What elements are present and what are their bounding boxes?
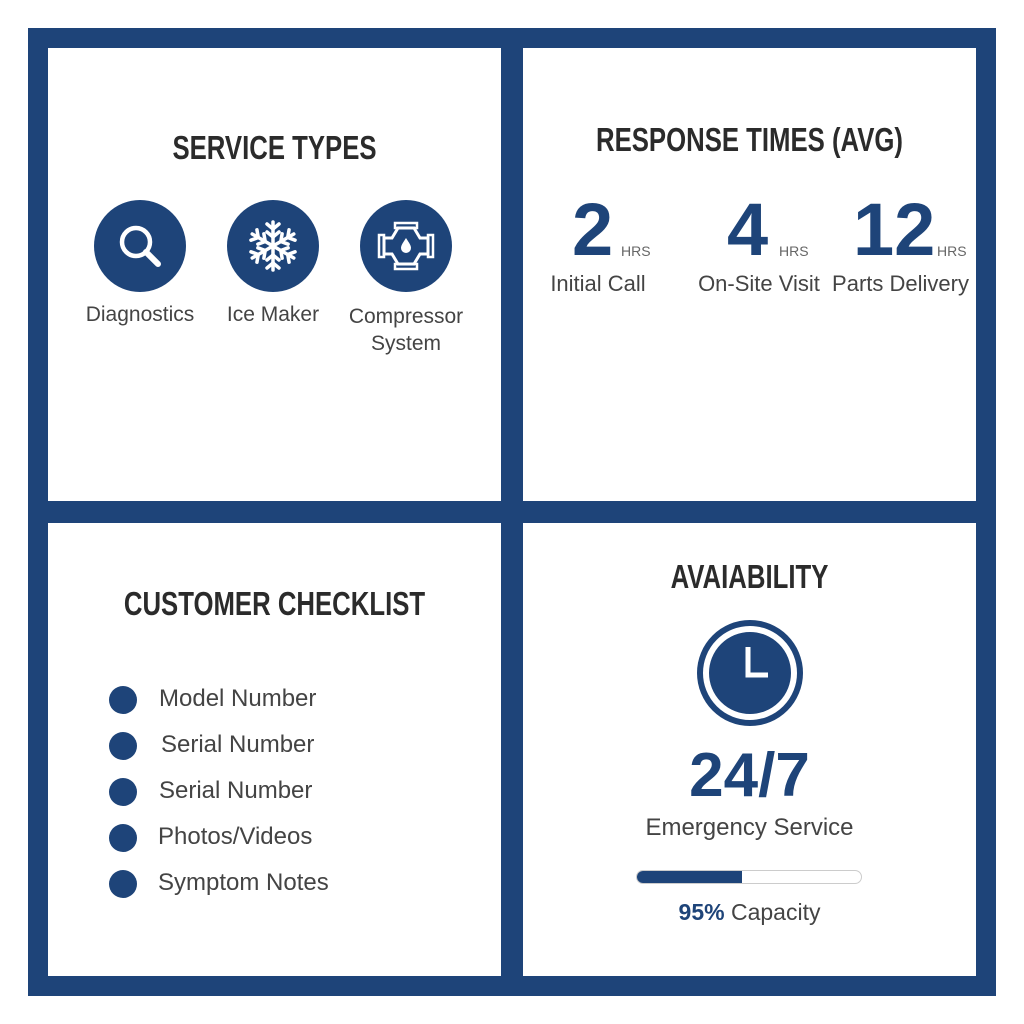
checklist items: Photos/Videos <box>158 823 312 850</box>
label: emergency service: Emergency Service <box>645 814 854 841</box>
item 1 <box>109 685 316 714</box>
label: compressor system: System <box>371 332 441 355</box>
heading: availability: AVAIABILITY <box>671 558 828 595</box>
stat: 4 hrs <box>727 188 809 271</box>
checklist items: Serial Number <box>159 777 312 804</box>
stat: 2 hrs <box>572 188 651 271</box>
item 4 <box>109 823 312 852</box>
progress bar <box>636 870 862 884</box>
label: compressor system: Compressor <box>349 305 463 328</box>
panel: service types <box>48 48 501 501</box>
label: on-site visit: On-Site Visit <box>698 271 820 296</box>
stat: 12 hrs: 12 <box>853 188 935 271</box>
icon: snowflake <box>227 200 319 292</box>
icon: compressor pipe <box>360 200 452 292</box>
stat: 4 hrs: 4 <box>727 188 768 271</box>
stat: 2 hrs: 2 <box>572 188 613 271</box>
stat: 24/7: 24/7 <box>689 741 810 810</box>
item 2 <box>109 731 314 760</box>
item 5 <box>109 869 329 898</box>
stat: 4 hrs: HRS <box>779 243 809 259</box>
stat: 2 hrs: HRS <box>621 243 651 259</box>
stat: 12 hrs: HRS <box>937 243 967 259</box>
icon: clock <box>697 620 803 726</box>
heading: customer checklist: CUSTOMER CHECKLIST <box>124 585 425 622</box>
label: ice maker: Ice Maker <box>227 303 319 326</box>
label: capacity: 95% Capacity <box>679 899 820 925</box>
panel: availability <box>523 523 976 976</box>
heading: response times: RESPONSE TIMES (AVG) <box>596 121 903 158</box>
icon: magnifier <box>94 200 186 292</box>
checklist items: Serial Number <box>161 731 314 758</box>
checklist items: Symptom Notes <box>158 869 329 896</box>
label: parts delivery: Parts Delivery <box>832 271 969 296</box>
item 3 <box>109 777 312 806</box>
label: initial call: Initial Call <box>550 271 646 296</box>
checklist items <box>109 685 329 898</box>
panel: response times <box>523 48 976 501</box>
label: compressor system <box>349 305 463 355</box>
checklist items: Model Number <box>159 685 316 712</box>
heading: service types: SERVICE TYPES <box>172 129 377 166</box>
label: diagnostics: Diagnostics <box>86 303 194 326</box>
panel: customer checklist <box>48 523 501 976</box>
